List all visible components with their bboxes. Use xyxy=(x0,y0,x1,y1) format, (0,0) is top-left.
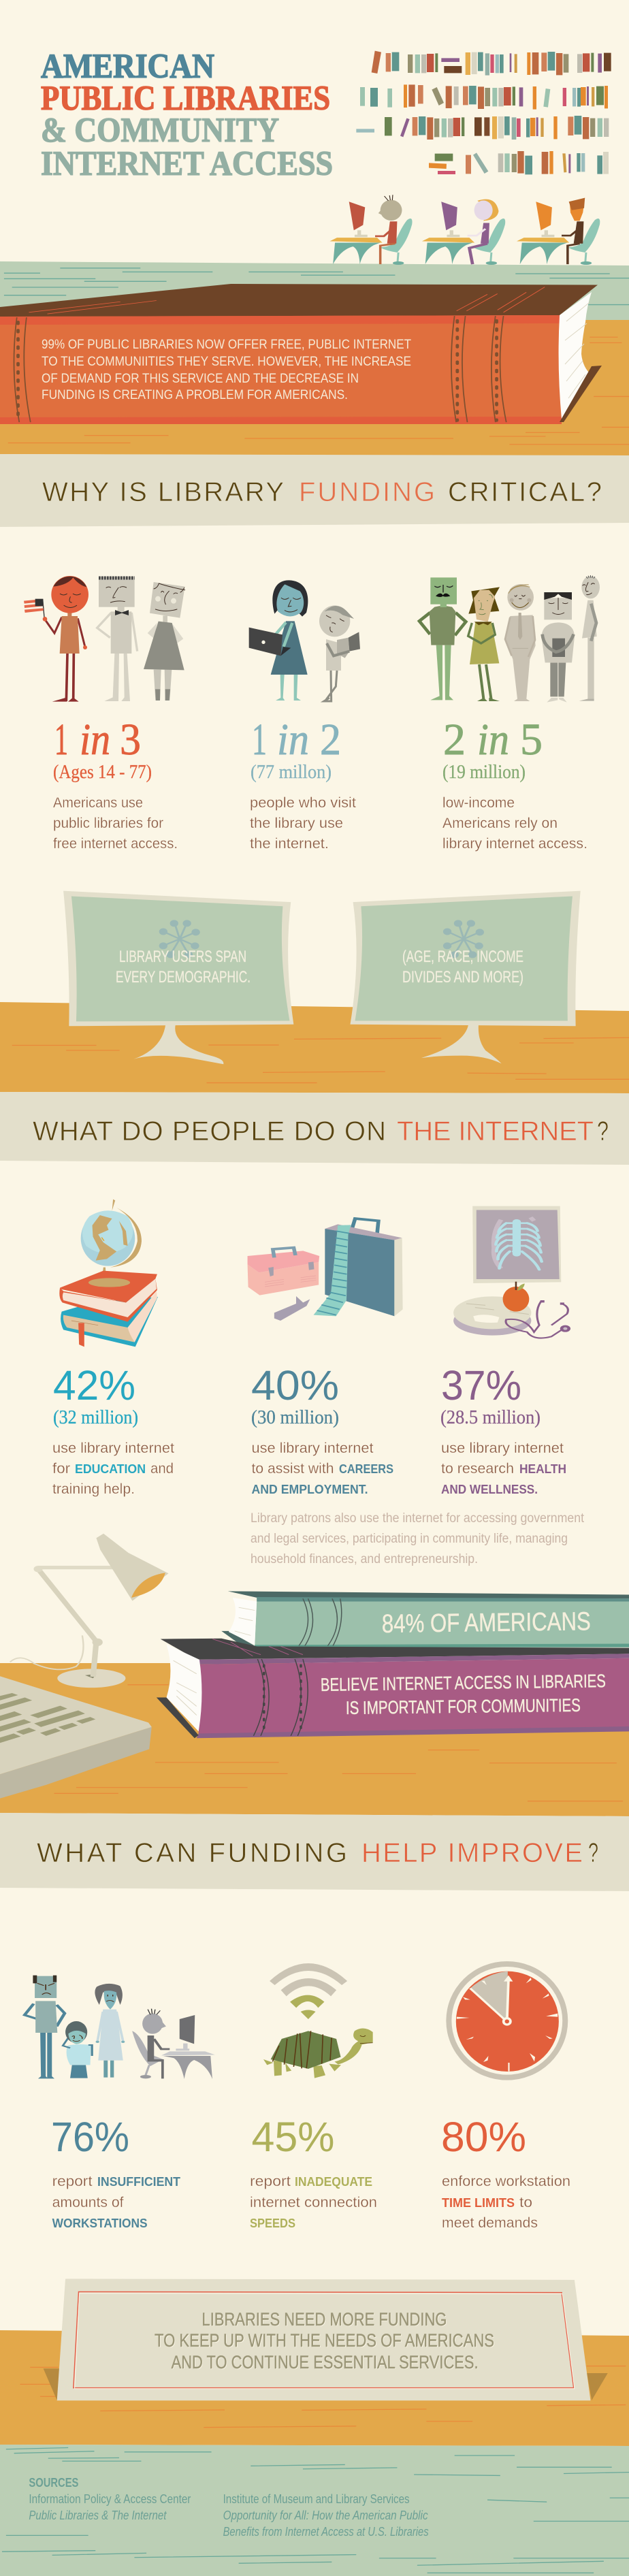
section band: why funding xyxy=(0,454,629,527)
woman with laptop xyxy=(249,580,308,701)
stat: 80 percent time limits xyxy=(441,2114,570,2231)
book text: TO THE COMMUNIITIES THEY SERVE. HOWEVER, THE INCREASE xyxy=(42,354,411,369)
sources: SOURCES xyxy=(29,2476,78,2490)
stat: 76 percent workstations: amounts of xyxy=(52,2195,124,2210)
left monitor xyxy=(63,891,293,1064)
left monitor: LIBRARY USERS SPAN xyxy=(119,948,246,966)
book spine xyxy=(0,315,562,424)
heading: what do people do on the internet xyxy=(33,1116,609,1146)
book text: FUNDING IS CREATING A PROBLEM FOR AMERICANS. xyxy=(42,387,348,402)
stat: 1 in 3: 3 xyxy=(120,715,141,764)
person in grey dress xyxy=(144,582,185,701)
desk 2 streaks xyxy=(54,1685,617,1793)
book top cover xyxy=(0,284,598,317)
stat: 1 in 2: in xyxy=(277,715,309,764)
stat: 80 percent time limits: enforce workstation xyxy=(442,2174,570,2189)
stat: 40 percent careers xyxy=(251,1362,393,1496)
right monitor: DIVIDES AND MORE) xyxy=(402,968,523,986)
bottom streaks xyxy=(2,2366,629,2573)
title: & COMMUNITY xyxy=(41,112,279,150)
icon: frustrated family and workstation xyxy=(25,1976,215,2079)
title xyxy=(41,48,333,183)
icon: globe on books xyxy=(59,1200,158,1347)
stat: 80 percent time limits: meet demands xyxy=(442,2215,538,2231)
table sign: call to action: LIBRARIES NEED MORE FUNDING xyxy=(202,2310,447,2330)
stat: 42 percent education: use library internet xyxy=(52,1440,174,1456)
angry father xyxy=(25,1976,65,2078)
table top orange xyxy=(0,320,629,456)
icon: laptop xyxy=(0,1676,152,1799)
big orange book xyxy=(0,284,602,424)
person at purple computer xyxy=(422,199,505,265)
stat: 80 percent time limits: TIME LIMITS xyxy=(442,2196,515,2210)
stat: 2 in 5: 5 xyxy=(520,715,543,764)
stat: 37 percent health xyxy=(440,1362,566,1496)
heading: why is library funding critical xyxy=(42,477,602,507)
heading: why is library funding critical: WHY IS LIBRARY xyxy=(42,477,284,507)
stat: 45 percent speeds: internet connection xyxy=(250,2195,377,2210)
stat: 1 in 2: the library use xyxy=(250,816,343,831)
stat: 45 percent speeds: report xyxy=(250,2174,291,2189)
stat: 76 percent workstations: 76% xyxy=(51,2114,129,2160)
orange streak near band xyxy=(528,1801,623,1802)
title: INTERNET ACCESS xyxy=(41,145,333,183)
stat: 45 percent speeds: 45% xyxy=(252,2114,335,2160)
stat: 42 percent education xyxy=(52,1362,174,1497)
book text: OF DEMAND FOR THIS SERVICE AND THE DECREASE IN xyxy=(42,371,359,386)
group: three people with flag xyxy=(24,576,360,702)
icon: toolbox, briefcase and tie xyxy=(248,1219,403,1321)
book text xyxy=(42,337,411,402)
stat: 1 in 3: Americans use xyxy=(53,795,143,811)
person with bowtie xyxy=(97,577,138,701)
heading: what can funding help improve: HELP IMPROVE xyxy=(361,1838,583,1868)
stat: 37 percent health: AND WELLNESS. xyxy=(441,1483,538,1496)
heading: what do people do on the internet: WHAT DO PEOPLE DO ON xyxy=(33,1116,386,1146)
stat: 40 percent careers: (30 million) xyxy=(251,1406,339,1428)
table sign: call to action: TO KEEP UP WITH THE NEEDS OF AMERICANS xyxy=(155,2330,494,2351)
stat: 2 in 5: 2 xyxy=(443,715,466,764)
text block: other uses: household finances, and entrepreneurship. xyxy=(251,1552,478,1566)
table sign: call to action: AND TO CONTINUE ESSENTIAL SERVICES. xyxy=(172,2352,479,2372)
stat: 1 in 3: (Ages 14 - 77) xyxy=(53,761,152,783)
sources: Public Libraries & The Internet xyxy=(29,2509,167,2522)
stat: 1 in 3: public libraries for xyxy=(53,816,163,831)
heading: what do people do on the internet: THE INTERNET xyxy=(397,1116,594,1146)
text block: other uses: and legal services, participating in community life, managing xyxy=(251,1532,568,1546)
stat: 42 percent education: for xyxy=(52,1461,70,1477)
stat: 42 percent education: EDUCATION xyxy=(75,1462,146,1476)
stat: 1 in 3: 1 xyxy=(54,715,68,764)
book pages xyxy=(559,292,592,419)
icon: starburst xyxy=(444,920,483,957)
stat: 80 percent time limits: 80% xyxy=(441,2114,526,2160)
heading: what can funding help improve xyxy=(37,1838,598,1868)
icon: starburst xyxy=(160,920,199,957)
stacked books with 84 percent message xyxy=(157,1591,629,1738)
desk streaks xyxy=(12,1037,629,1083)
icon: desk lamp xyxy=(10,1534,169,1688)
group: five people xyxy=(419,575,600,703)
desk 3 xyxy=(0,2330,629,2446)
stat: 40 percent careers: use library internet xyxy=(252,1440,374,1456)
seated man at computer xyxy=(132,2009,215,2079)
title: AMERICAN xyxy=(41,48,214,86)
desk xyxy=(0,1002,629,1093)
stat: 1 in 2: (77 millon) xyxy=(251,761,332,783)
bookshelf of books xyxy=(356,51,611,174)
stat: 76 percent workstations: WORKSTATIONS xyxy=(52,2217,148,2230)
stat: 42 percent education: 42% xyxy=(53,1362,135,1408)
stat: 37 percent health: 37% xyxy=(441,1362,521,1408)
stat: 1 in 3: in xyxy=(80,715,110,764)
boy xyxy=(63,2021,92,2078)
left monitor: EVERY DEMOGRAPHIC. xyxy=(116,968,251,986)
stat: 45 percent speeds: SPEEDS xyxy=(250,2217,295,2230)
stat: 37 percent health: to research xyxy=(441,1461,514,1477)
stat: 40 percent careers: CAREERS xyxy=(339,1462,393,1476)
sources xyxy=(29,2476,429,2539)
stat: 2 in 5: library internet access. xyxy=(442,836,587,852)
text block: other uses: Library patrons also use the internet for accessing government xyxy=(251,1511,585,1526)
person at red computer xyxy=(329,195,413,265)
purple book xyxy=(157,1639,629,1738)
sources: Benefits from Internet Access at U.S. Libraries xyxy=(223,2525,429,2539)
stat: 2 in 5: Americans rely on xyxy=(442,816,558,831)
heading: why is library funding critical: FUNDING xyxy=(299,477,435,507)
tall thin man xyxy=(579,575,600,701)
stat: 2 in 5: (19 million) xyxy=(442,761,526,783)
book highlights and stitching xyxy=(14,287,545,422)
stat: 1 in 2: the internet. xyxy=(250,836,329,852)
person at orange computer xyxy=(517,198,600,265)
section band: internet use xyxy=(0,1092,629,1165)
stat: 80 percent time limits: to xyxy=(519,2195,532,2210)
stat: 45 percent speeds xyxy=(250,2114,377,2230)
table top mint xyxy=(0,261,629,327)
desk 2 xyxy=(0,1663,629,1816)
three people at computers on the book xyxy=(329,195,600,265)
table sign: call to action: TO KEEP UP WITH THE NEEDS OF AMERICANS xyxy=(155,2331,495,2351)
stat: 2 in 5: in xyxy=(477,715,509,764)
heading: why is library funding critical: CRITICAL? xyxy=(448,477,602,507)
sources: Institute of Museum and Library Services xyxy=(223,2492,410,2506)
book back cover xyxy=(560,366,602,422)
table sign: call to action: LIBRARIES NEED MORE FUNDING xyxy=(201,2309,447,2330)
stat: 1 in 2: 1 xyxy=(252,715,267,764)
mother xyxy=(95,1984,125,2078)
stat: 76 percent workstations: INSUFFICIENT xyxy=(97,2175,180,2189)
right monitor xyxy=(350,891,581,1063)
stat: 42 percent education: and xyxy=(150,1461,174,1477)
person with flag xyxy=(24,576,88,702)
man with mustache xyxy=(419,577,466,700)
stat: 40 percent careers: AND EMPLOYMENT. xyxy=(252,1483,368,1496)
stat: 1 in 2: 2 xyxy=(320,715,341,764)
icon: x-ray, apple, scale and stethoscope xyxy=(453,1206,570,1338)
bottom mint table xyxy=(0,2445,629,2576)
table sign: call to action: AND TO CONTINUE ESSENTIAL SERVICES. xyxy=(172,2353,479,2373)
stat: 37 percent health: HEALTH xyxy=(519,1462,566,1476)
book text: 84% OF AMERICANS xyxy=(382,1607,591,1639)
stat: 40 percent careers: to assist with xyxy=(252,1461,334,1477)
stat: 1 in 3 xyxy=(53,715,178,852)
heading: what do people do on the internet: ? xyxy=(597,1116,609,1146)
book text: 99% OF PUBLIC LIBRARIES NOW OFFER FREE, PUBLIC INTERNET xyxy=(42,337,411,352)
icon: wall clock xyxy=(446,1961,568,2080)
stat: 37 percent health: use library internet xyxy=(441,1440,564,1456)
book text xyxy=(321,1607,606,1718)
stat: 2 in 5: low-income xyxy=(442,795,515,811)
heading: what can funding help improve: WHAT CAN FUNDING xyxy=(37,1838,347,1868)
man holding book xyxy=(541,592,575,703)
woman in green dress xyxy=(468,587,500,701)
sources: Opportunity for All: How the American Public xyxy=(223,2509,428,2522)
sources: Information Policy & Access Center xyxy=(29,2492,191,2506)
stat: 45 percent speeds: INADEQUATE xyxy=(295,2175,372,2189)
stat: 42 percent education: (32 million) xyxy=(53,1406,138,1428)
smiling bald man xyxy=(505,584,536,701)
title: PUBLIC LIBRARIES xyxy=(41,80,330,118)
stat: 1 in 2: people who visit xyxy=(250,795,356,811)
boy with book xyxy=(319,605,360,701)
green book xyxy=(221,1591,629,1647)
table sign: call to action xyxy=(44,2279,608,2400)
right monitor: (AGE, RACE, INCOME xyxy=(402,948,523,966)
stat: 1 in 2 xyxy=(250,715,356,852)
stat: 2 in 5 xyxy=(442,715,587,852)
stat: 1 in 3: free internet access. xyxy=(53,836,178,852)
stat: 76 percent workstations: report xyxy=(52,2174,93,2189)
heading: what can funding help improve: ? xyxy=(588,1838,598,1868)
table streaks xyxy=(4,268,629,445)
section band: improvements xyxy=(0,1813,629,1891)
stat: 42 percent education: training help. xyxy=(52,1481,135,1497)
stat: 37 percent health: (28.5 million) xyxy=(440,1406,541,1428)
icon: wifi over turtle xyxy=(263,1963,373,2078)
stat: 40 percent careers: 40% xyxy=(251,1362,339,1408)
text block: other uses xyxy=(251,1511,585,1566)
stat: 76 percent workstations xyxy=(51,2114,180,2230)
